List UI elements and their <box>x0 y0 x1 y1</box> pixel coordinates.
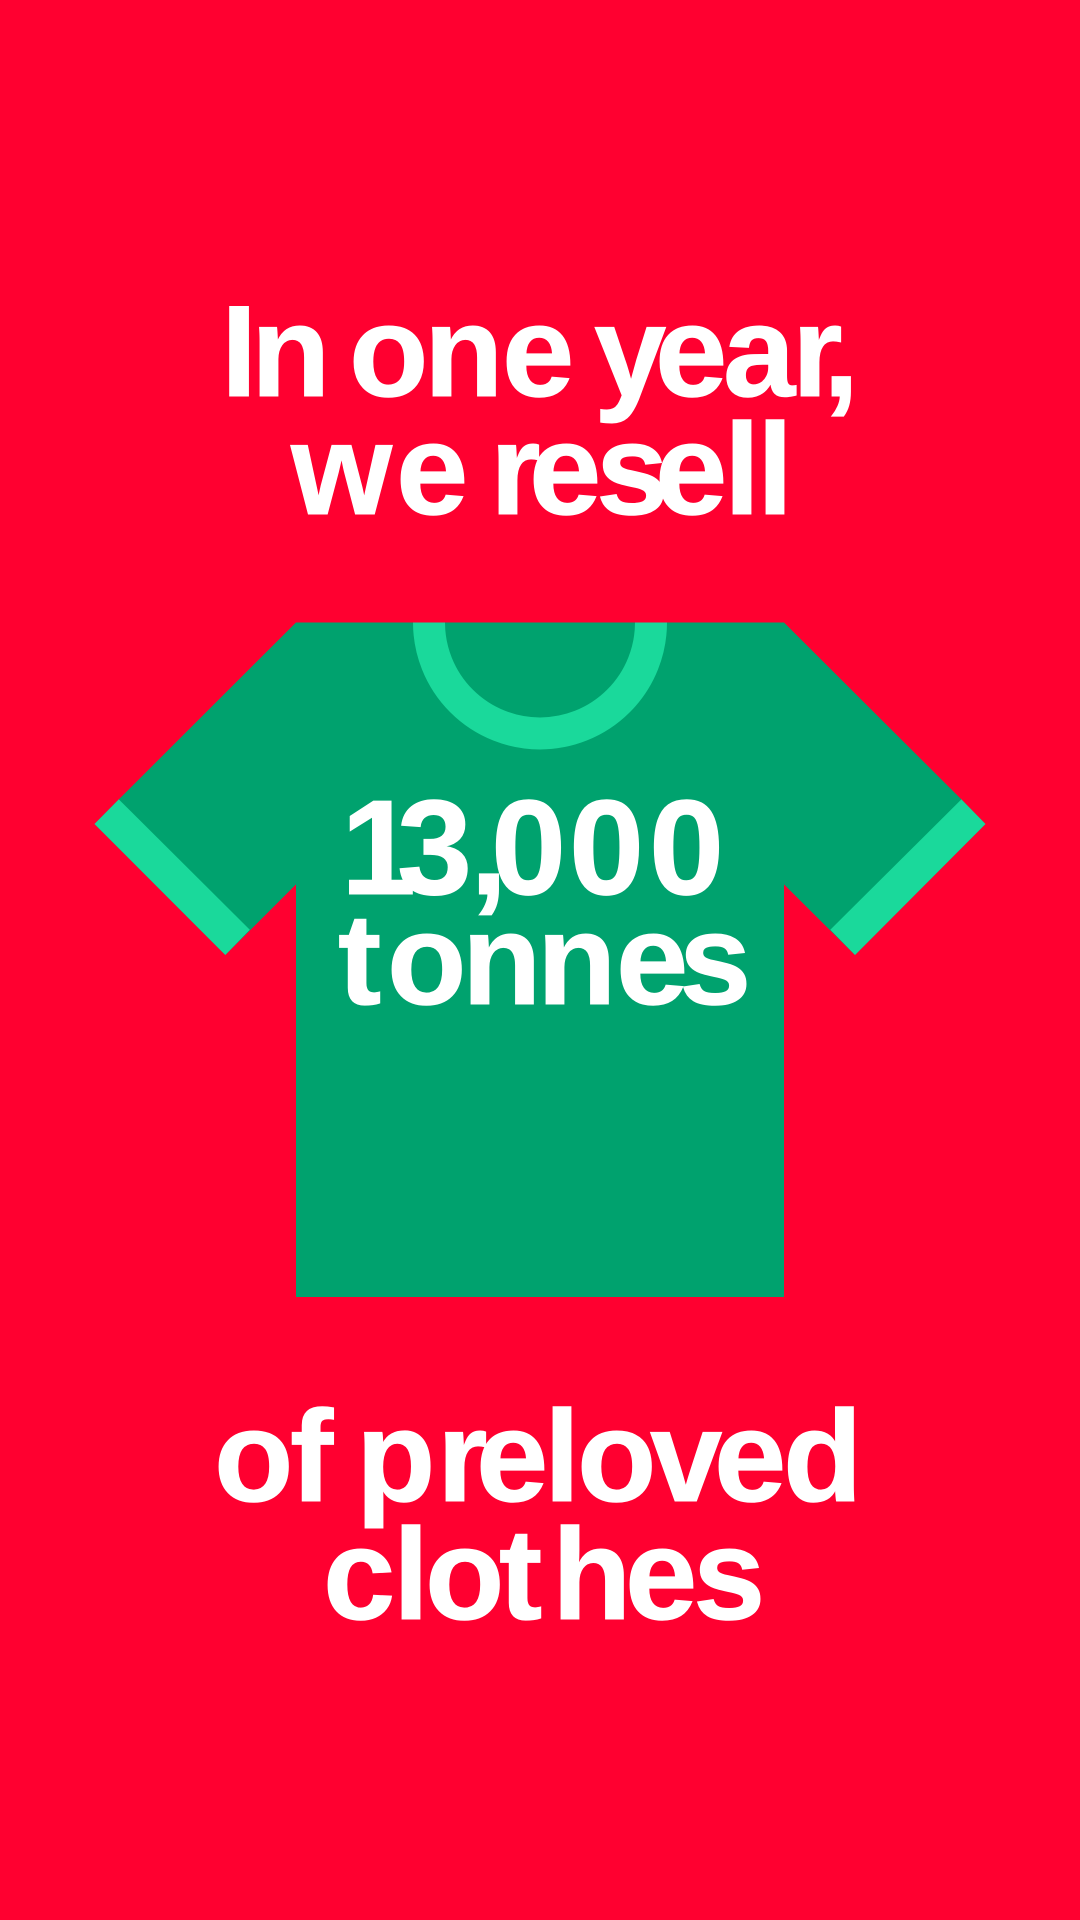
statistic: 13,000 tonnes: tonnes <box>338 886 751 1032</box>
heading: bottom text: clothes <box>323 1501 765 1647</box>
collar <box>429 622 651 733</box>
right sleeve cuff <box>830 799 986 955</box>
heading: bottom text <box>214 1383 862 1647</box>
heading: top text: In one year, <box>221 278 859 424</box>
icon: green t-shirt <box>94 622 986 1297</box>
shirt body <box>94 622 986 1297</box>
heading: bottom text: of preloved <box>214 1383 862 1529</box>
heading: top text: we resell <box>290 396 793 542</box>
left sleeve cuff <box>94 799 250 955</box>
statistic: 13,000 tonnes <box>338 772 751 1032</box>
statistic: 13,000 tonnes: 13,000 <box>341 772 724 923</box>
heading: top text <box>221 278 859 542</box>
